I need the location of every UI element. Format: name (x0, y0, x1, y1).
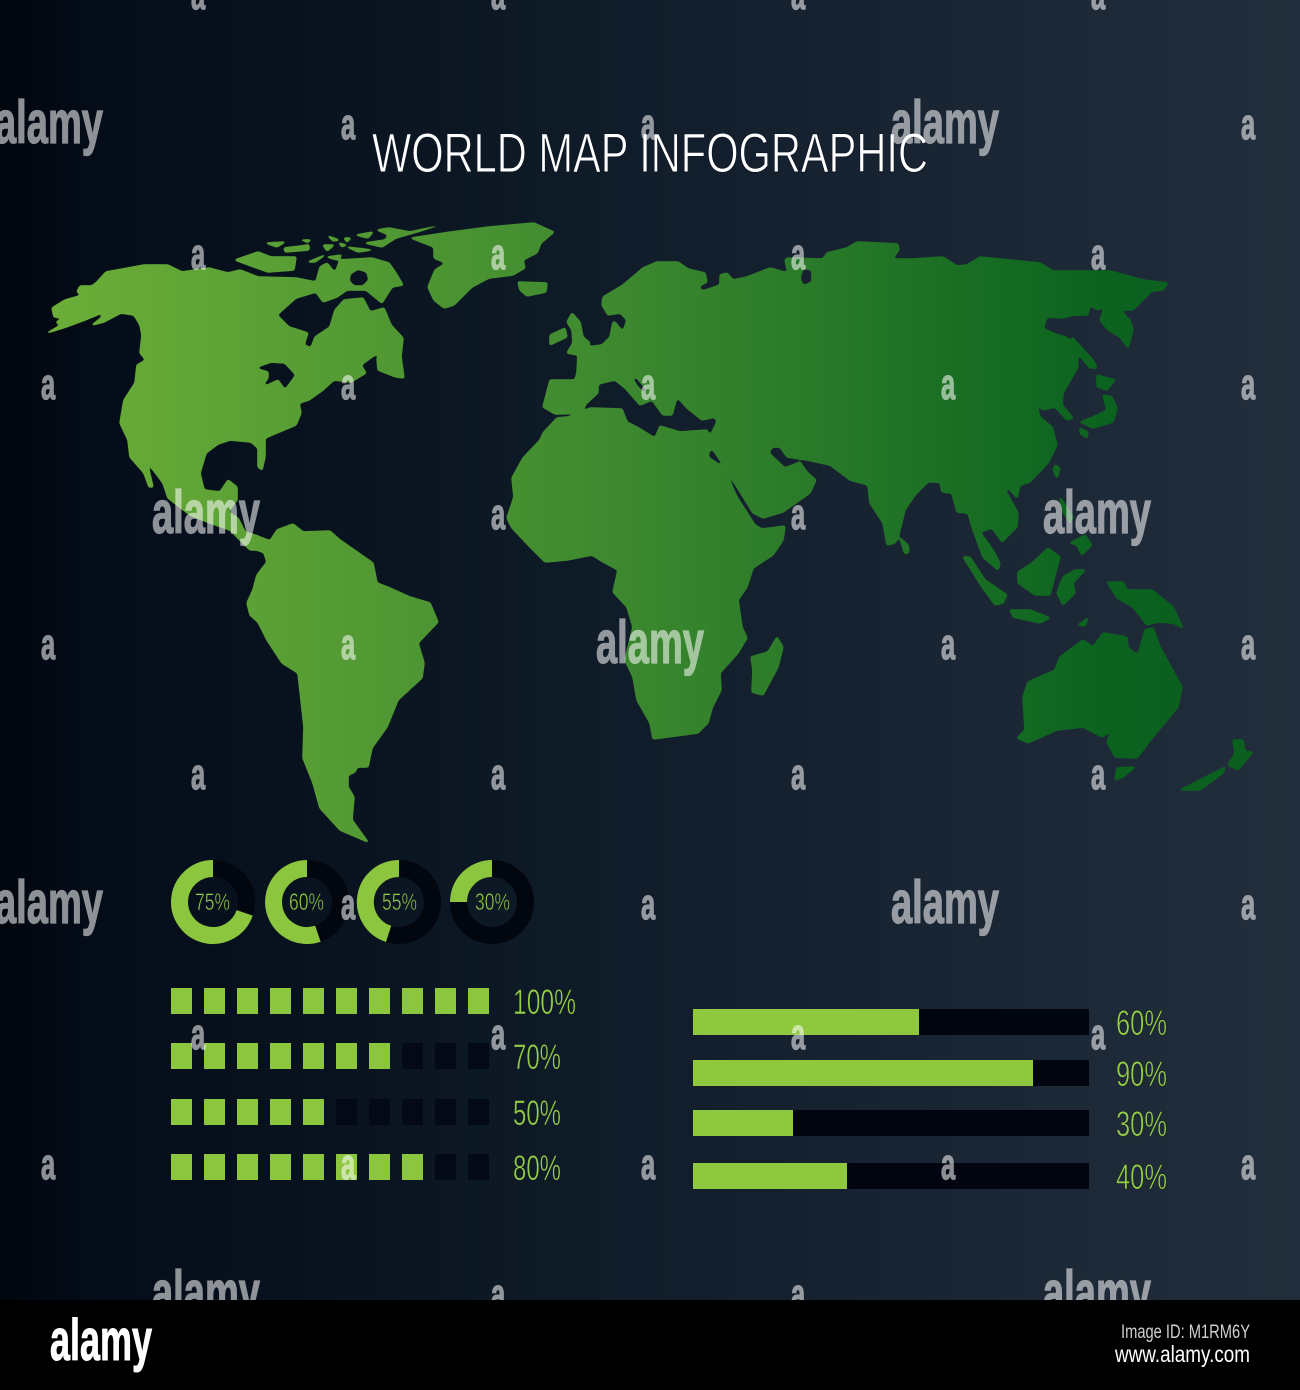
stock watermark overlay: aaaa (191, 1009, 1106, 1059)
donut charts (180, 868, 526, 936)
row: 80% (171, 1149, 561, 1188)
bar: 60%: 60% (1116, 1004, 1167, 1043)
stock watermark overlay: aaaa (191, 229, 1106, 279)
Japan and north-east islands (1072, 337, 1117, 438)
donut: 60%: 60% (289, 889, 324, 916)
continent: Eurasia (543, 242, 1168, 570)
horizontal bar chart (693, 1004, 1167, 1197)
stock watermark overlay: alamy (1043, 479, 1151, 546)
bar: 90%: 90% (1116, 1055, 1167, 1094)
row: 100% (171, 983, 576, 1022)
stock watermark overlay: alamy (152, 1259, 260, 1326)
bar: 90% (693, 1055, 1167, 1094)
stock watermark overlay: alamy (0, 869, 103, 936)
Greenland (411, 223, 554, 308)
Iceland (518, 282, 547, 296)
stock watermark overlay: aaaa (41, 619, 1256, 669)
stock watermark overlay: aaaa (191, 749, 1106, 799)
New Zealand (1180, 740, 1253, 790)
stock watermark overlay: alamy (891, 89, 999, 156)
bar: 60% (693, 1004, 1167, 1043)
row: 70% (171, 1038, 561, 1077)
stock watermark overlay: alamy (0, 89, 103, 156)
donut: 75%: 75% (195, 889, 230, 916)
bar: 40%: 40% (1116, 1158, 1167, 1197)
website: www.alamy.com (1114, 1341, 1250, 1367)
donut: 55%: 55% (382, 889, 417, 916)
stock watermark overlay: aa (491, 1269, 806, 1319)
row: 100%: 100% (513, 983, 576, 1022)
Tasmania (1115, 767, 1135, 780)
row: 50% (171, 1094, 561, 1133)
Madagascar (751, 637, 783, 695)
South-east Asian islands (900, 465, 1092, 626)
stock watermark overlay: aaaaa (41, 1139, 1256, 1189)
stock watermark overlay: alamy (152, 479, 260, 546)
stock watermark overlay: alamy (596, 609, 704, 676)
donut: 30%: 30% (475, 889, 510, 916)
New Guinea (1107, 582, 1183, 628)
stock watermark overlay: aaa (341, 99, 1256, 149)
title: WORLD MAP INFOGRAPHIC (372, 121, 928, 184)
stock watermark overlay: aaa (341, 879, 1256, 929)
square progress rows (171, 983, 576, 1188)
donut: 55% (365, 868, 432, 936)
continent: Australia (1017, 628, 1182, 758)
row: 50%: 50% (513, 1094, 561, 1133)
bar: 30%: 30% (1116, 1105, 1167, 1144)
bar: 40% (693, 1158, 1167, 1197)
row: 80%: 80% (513, 1149, 561, 1188)
donut: 75% (180, 868, 246, 936)
arctic islands (235, 226, 437, 272)
donut: 30% (458, 868, 526, 936)
British Isles (550, 313, 590, 353)
footer logo: alamy (50, 1308, 152, 1373)
world map (47, 223, 1253, 842)
continent: North America (47, 258, 404, 552)
footer band (0, 1300, 1300, 1390)
donut: 60% (274, 868, 340, 936)
stock watermark overlay: alamy (1043, 1259, 1151, 1326)
stock watermark overlay: alamy (891, 869, 999, 936)
stock watermark overlay: aaaaa (41, 359, 1256, 409)
row: 70%: 70% (513, 1038, 561, 1077)
stock watermark overlay: aa (491, 489, 806, 539)
continent: Africa (507, 408, 785, 739)
continent: South America (235, 524, 438, 842)
bar: 30% (693, 1105, 1167, 1144)
image id: Image ID: M1RM6Y (1121, 1322, 1250, 1343)
